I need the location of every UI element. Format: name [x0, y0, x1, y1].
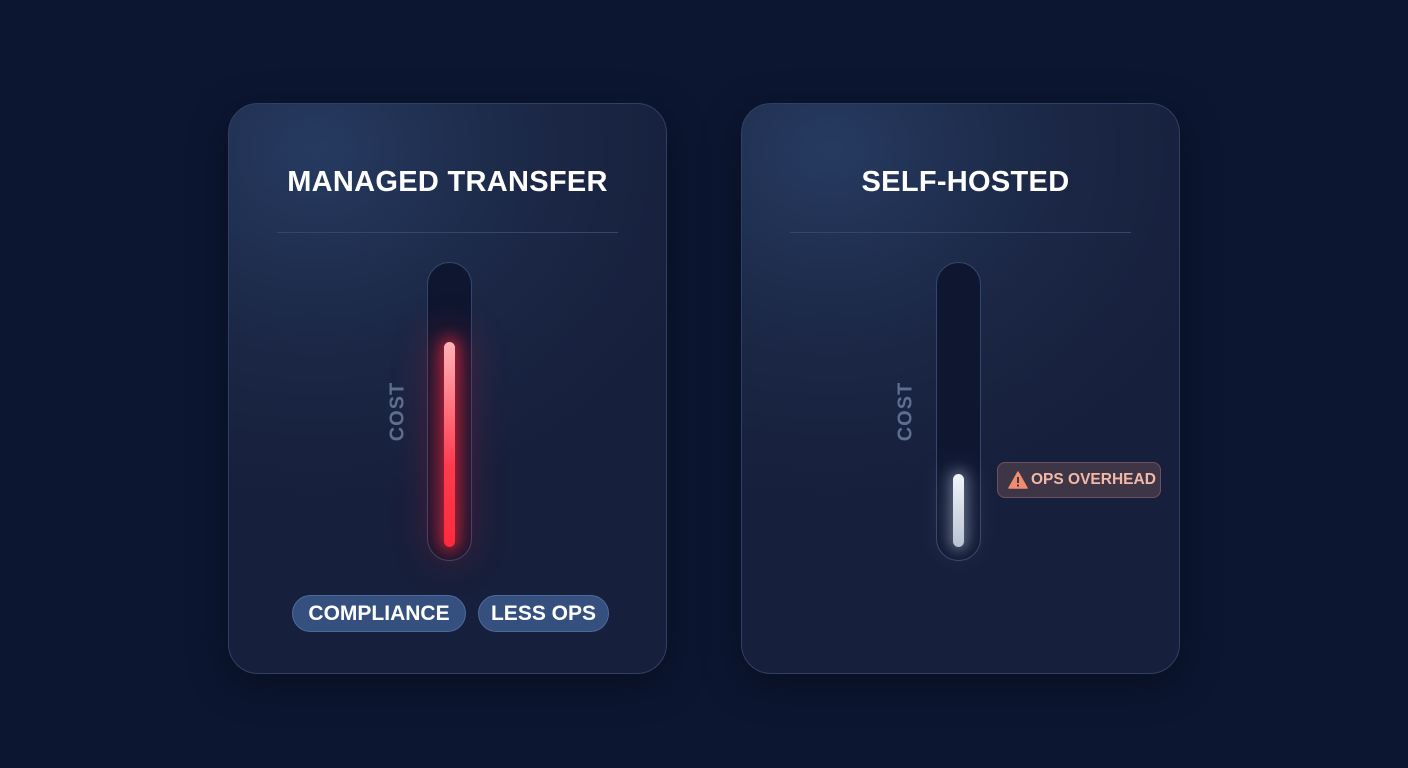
low cost bar [953, 474, 964, 547]
title: self-hosted: SELF-HOSTED [862, 166, 1069, 198]
pill: compliance [292, 595, 466, 632]
panel: self-hosted [741, 103, 1180, 674]
high cost bar [444, 342, 455, 547]
pill: compliance: COMPLIANCE [308, 602, 450, 625]
pill: less ops: LESS OPS [491, 602, 596, 625]
cost gauge track [936, 262, 981, 561]
cost label: COST [386, 382, 408, 441]
warning badge: ops overhead [997, 462, 1161, 498]
title: managed transfer: MANAGED TRANSFER [287, 166, 608, 198]
cost label: COST [894, 382, 916, 441]
panel: managed transfer [228, 103, 667, 674]
icon: warning [1008, 471, 1028, 489]
cost gauge track [427, 262, 472, 561]
pill: less ops [478, 595, 609, 632]
warning badge: ops overhead: OPS OVERHEAD [1031, 471, 1156, 488]
